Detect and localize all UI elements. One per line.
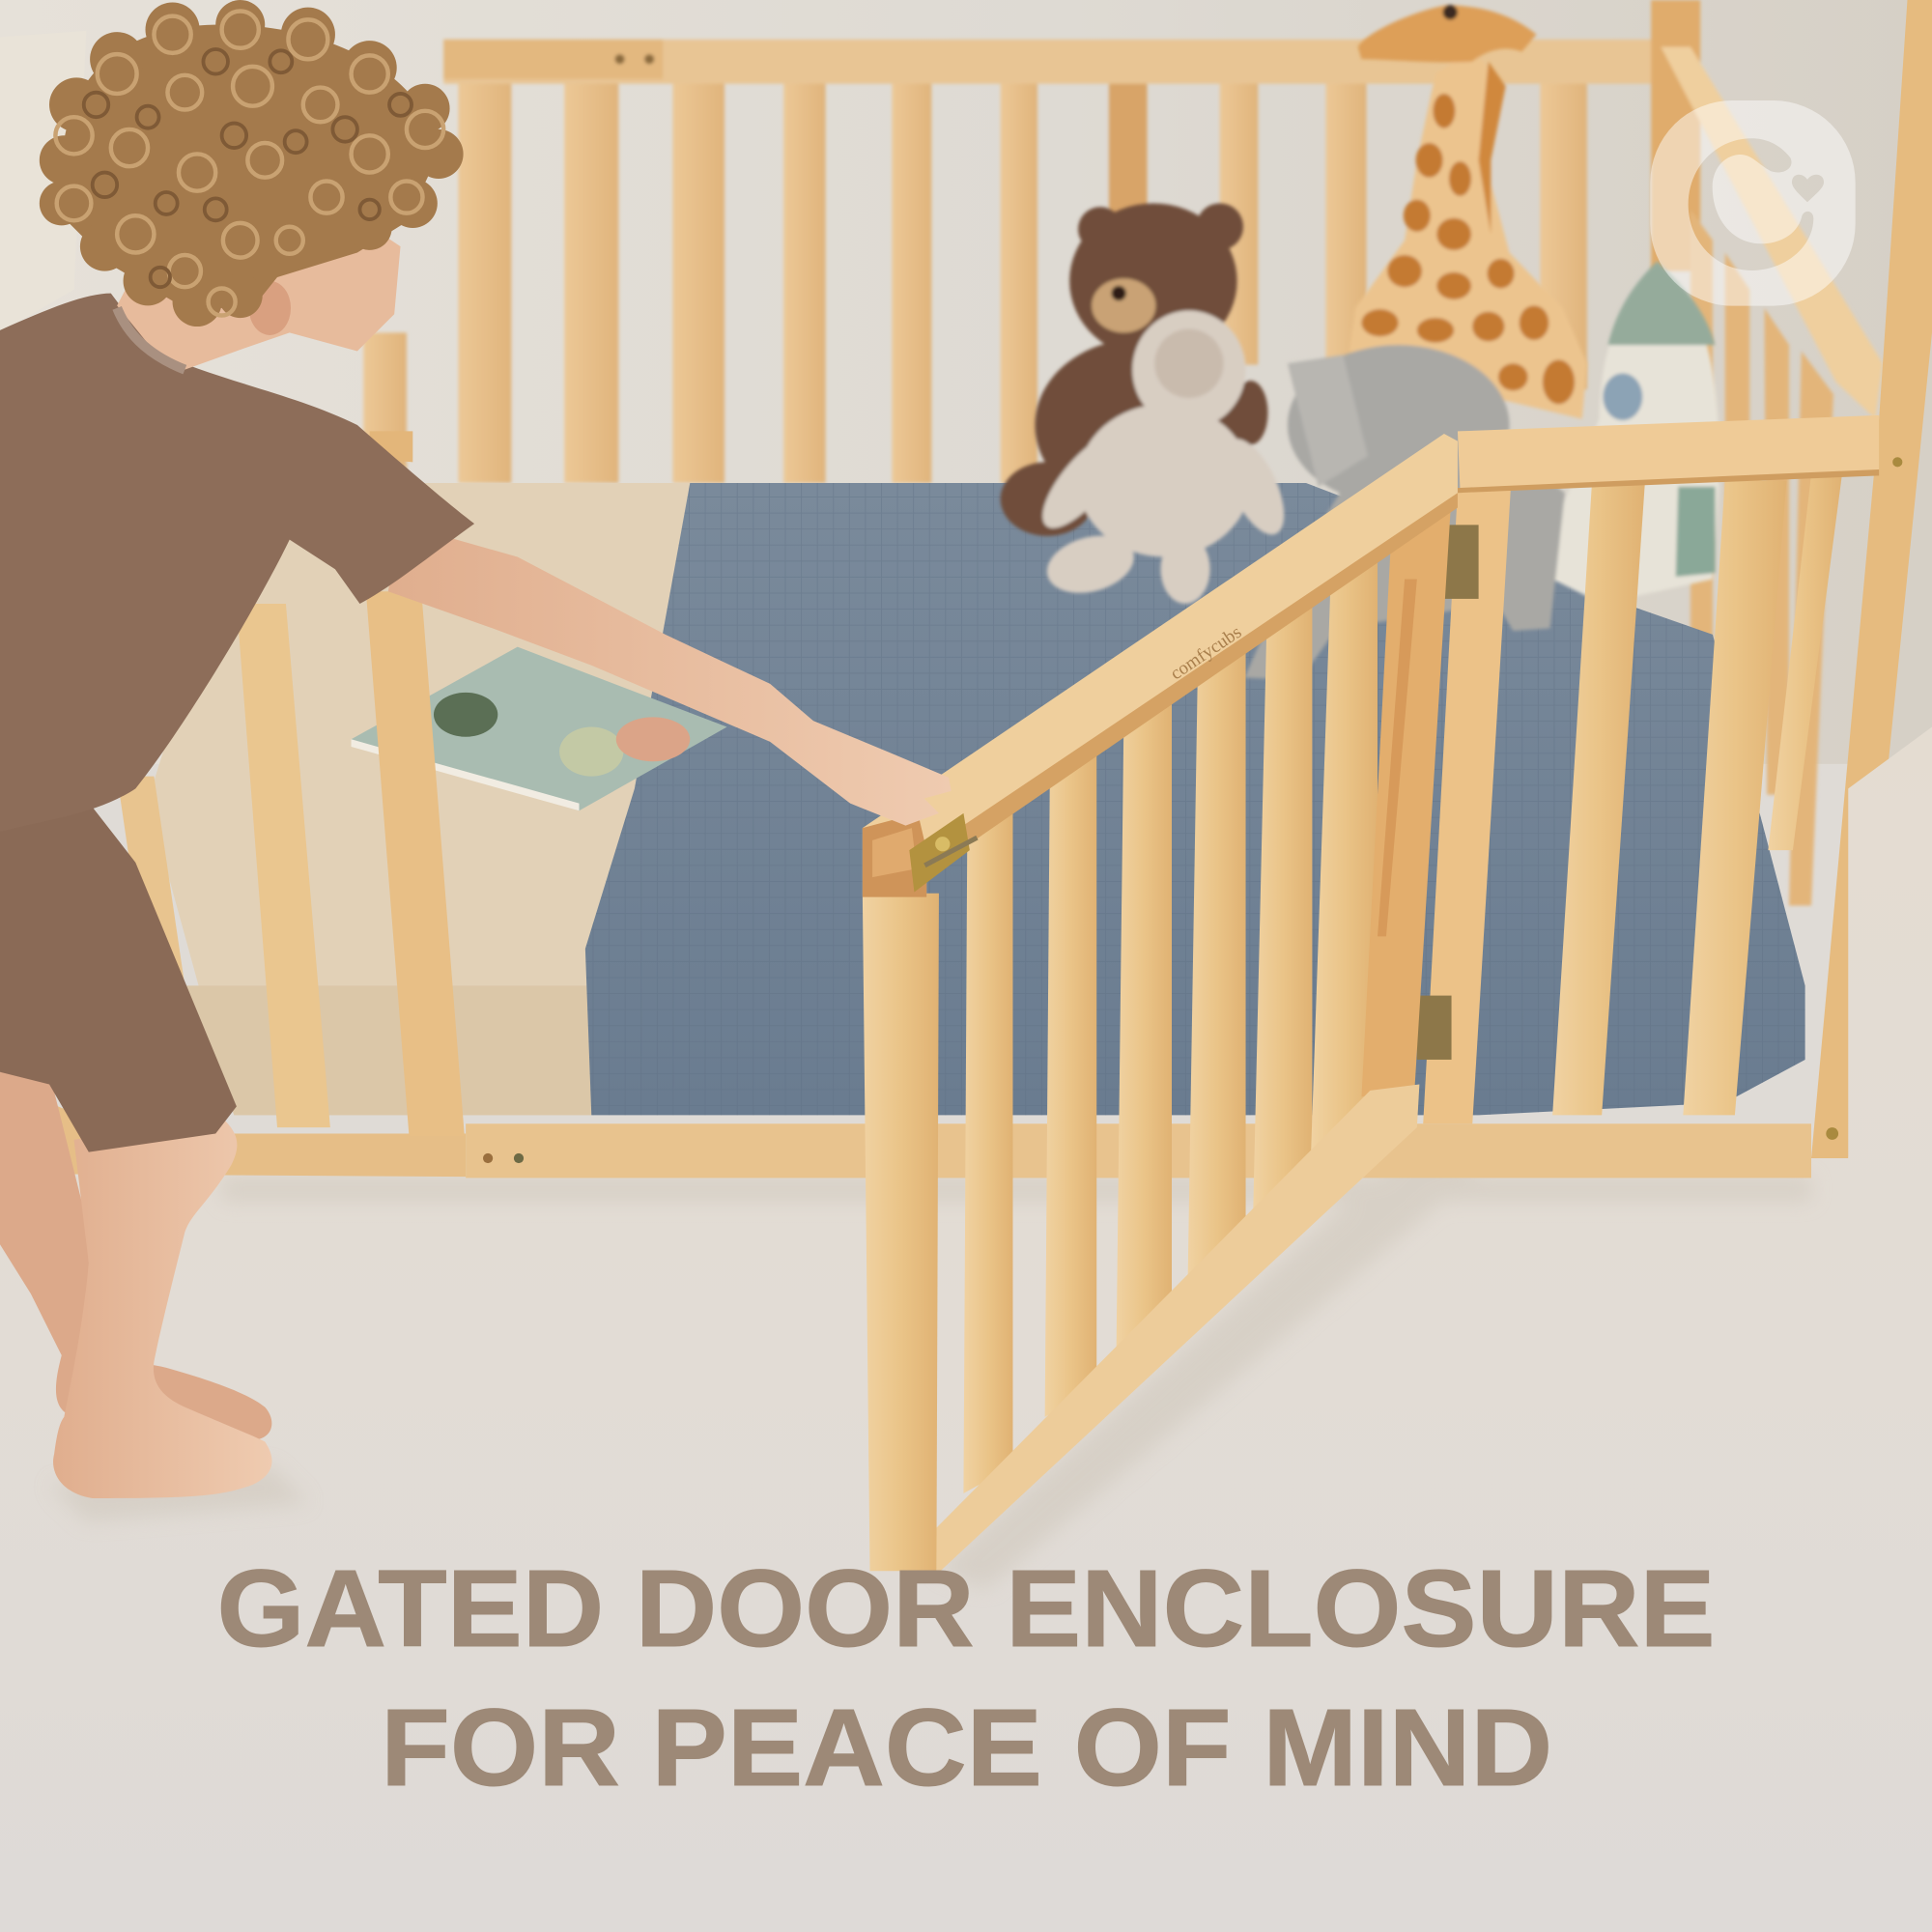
gate bottom rail — [936, 1084, 1419, 1575]
neck and face — [117, 185, 401, 370]
brand logo badge — [1650, 100, 1856, 306]
toy: grey elephant — [1244, 345, 1565, 680]
roof rafter — [1661, 46, 1883, 419]
boy reaching to the gate — [0, 0, 952, 1498]
toy: brown bear — [1001, 203, 1267, 536]
carpet floor — [0, 727, 1932, 1932]
blue waffle mattress — [585, 483, 1805, 1115]
back leg — [0, 1072, 271, 1454]
roof post — [1651, 0, 1700, 271]
curly hair — [40, 0, 464, 327]
soft shadows on the carpet — [49, 1140, 1811, 1589]
side rail — [1458, 415, 1879, 489]
back frame of the bed — [363, 0, 1883, 906]
side slats — [1552, 474, 1842, 1115]
pillow and window light on the left — [0, 31, 86, 332]
hinges — [1441, 525, 1479, 599]
front frame of the bed — [49, 431, 1902, 1178]
beige mattress section — [148, 483, 690, 1115]
gate top rail — [863, 434, 1458, 894]
right corner post — [1811, 0, 1932, 1158]
toy: giraffe — [1350, 5, 1587, 419]
shorts — [0, 807, 237, 1152]
book on the mattress — [352, 647, 727, 810]
side post at hinge — [1423, 491, 1511, 1123]
brass latch — [909, 813, 977, 892]
gate door — [863, 434, 1458, 1575]
brand mark on gate: comfycubs — [1167, 622, 1245, 684]
back rail — [443, 40, 1663, 84]
plush toys — [1001, 5, 1719, 680]
toy: lamb — [1030, 310, 1296, 604]
left slats — [366, 591, 465, 1136]
front rail — [49, 1103, 466, 1177]
gate post — [863, 894, 939, 1571]
back slats — [363, 81, 1587, 493]
arm — [388, 524, 952, 826]
toy: rocket — [1552, 261, 1719, 604]
headline line 2: FOR PEACE OF MIND — [381, 1687, 1552, 1809]
gate slats — [963, 542, 1378, 1493]
headline — [216, 1548, 1716, 1809]
shirt — [0, 294, 474, 832]
side wall of the bed behind the gate — [1417, 415, 1879, 1123]
gate hinge post — [1361, 496, 1452, 1096]
wall background — [0, 0, 1932, 764]
front leg — [53, 1115, 272, 1498]
headline line 1: GATED DOOR ENCLOSURE — [216, 1548, 1716, 1670]
far side slats under the roof — [1690, 210, 1833, 906]
